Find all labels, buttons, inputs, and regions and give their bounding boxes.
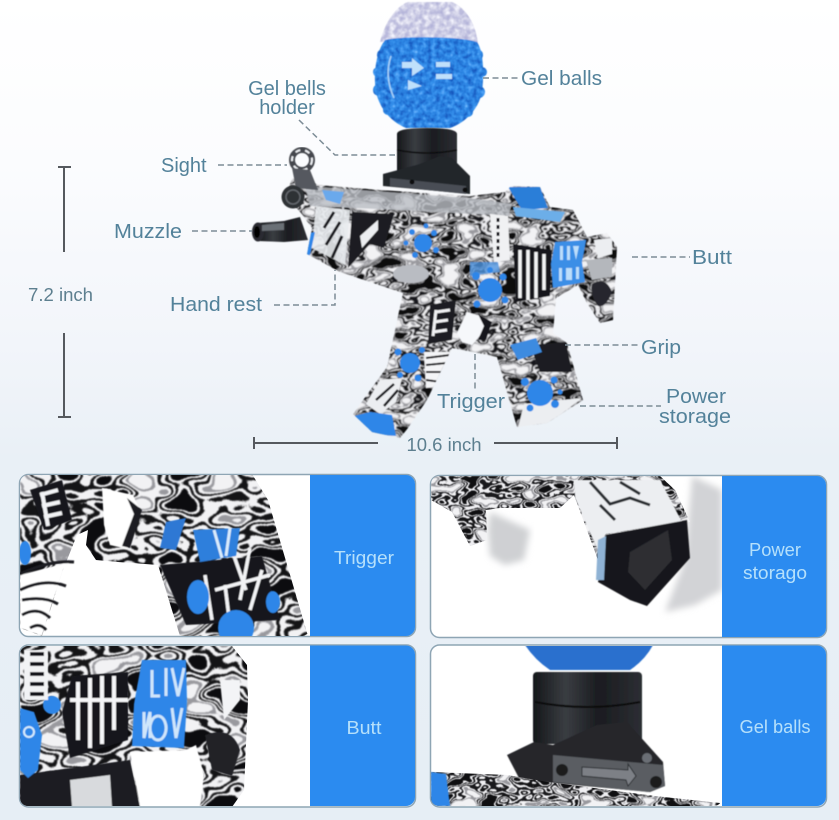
label: trigger: [437, 354, 505, 413]
label: trigger: Trigger: [437, 391, 505, 413]
blue tag: [722, 646, 826, 806]
trigger: [478, 314, 492, 340]
gun body: [280, 170, 625, 445]
white magazine lower: [366, 378, 402, 414]
label: gel balls: [483, 68, 602, 90]
black front block: [348, 212, 394, 268]
trigger guard opening: [457, 312, 487, 345]
blue splats: [394, 224, 562, 412]
blue tag: [310, 646, 415, 806]
label: gel bells holder: holder: [259, 97, 315, 119]
blue areas: [508, 187, 548, 210]
magazine stripes: [424, 352, 452, 388]
width dimension: 10.6 inch: 10.6 inch: [406, 435, 482, 455]
letter E block: [428, 300, 456, 344]
label: power storage: Power: [666, 386, 726, 408]
white spine block: [490, 214, 510, 262]
panel: trigger close-up: [19, 474, 416, 646]
photo: magazine base: [431, 476, 722, 612]
label: butt: [632, 247, 732, 269]
label: gel bells holder: Gel bells: [248, 78, 326, 100]
label: sight: Sight: [161, 155, 207, 177]
blue tag: [722, 476, 826, 637]
panel: butt close-up: [20, 645, 416, 808]
label: hand rest: Hand rest: [170, 294, 262, 316]
height dimension: 7.2 inch: [28, 167, 93, 417]
gel ball hopper: [370, 0, 490, 130]
height dimension: 7.2 inch: 7.2 inch: [28, 285, 93, 305]
tag text: Trigger: [334, 548, 394, 568]
width dimension: 10.6 inch: [254, 435, 617, 455]
receiver highlight band: [305, 186, 512, 216]
magazine holder: [383, 128, 470, 194]
grey handguard blob: [393, 265, 429, 283]
tag text: storago: [743, 563, 807, 583]
label: hand rest: [170, 270, 335, 316]
panel: gel balls close-up: [430, 645, 826, 807]
white grip area: [518, 398, 582, 428]
butt details: [592, 281, 612, 306]
label: power storage: [580, 386, 731, 428]
photo: hopper base: [431, 645, 722, 807]
label: grip: Grip: [641, 337, 681, 359]
tag text: Gel balls: [740, 717, 810, 737]
blue patch: LIVE NOW: [551, 240, 586, 288]
tag text: Power: [749, 540, 801, 560]
label: butt: Butt: [692, 247, 732, 269]
label: gel balls: Gel balls: [521, 68, 602, 90]
label: muzzle: Muzzle: [114, 221, 182, 243]
label: power storage: storage: [659, 406, 731, 428]
blue tag: [310, 475, 415, 636]
sight ring and rear drum: [282, 150, 318, 208]
photo: trigger area: [19, 474, 310, 646]
label: muzzle: [114, 221, 252, 243]
panel: power storage close-up: [430, 476, 826, 638]
label: grip: [565, 337, 681, 359]
tag text: Butt: [346, 718, 382, 738]
label: sight: [161, 155, 287, 177]
black stripe block: [513, 244, 552, 302]
photo: butt: [20, 646, 248, 806]
muzzle: [252, 217, 308, 242]
label: gel bells holder: [248, 78, 395, 155]
tag text: [743, 540, 807, 583]
front grey section: [312, 206, 350, 265]
